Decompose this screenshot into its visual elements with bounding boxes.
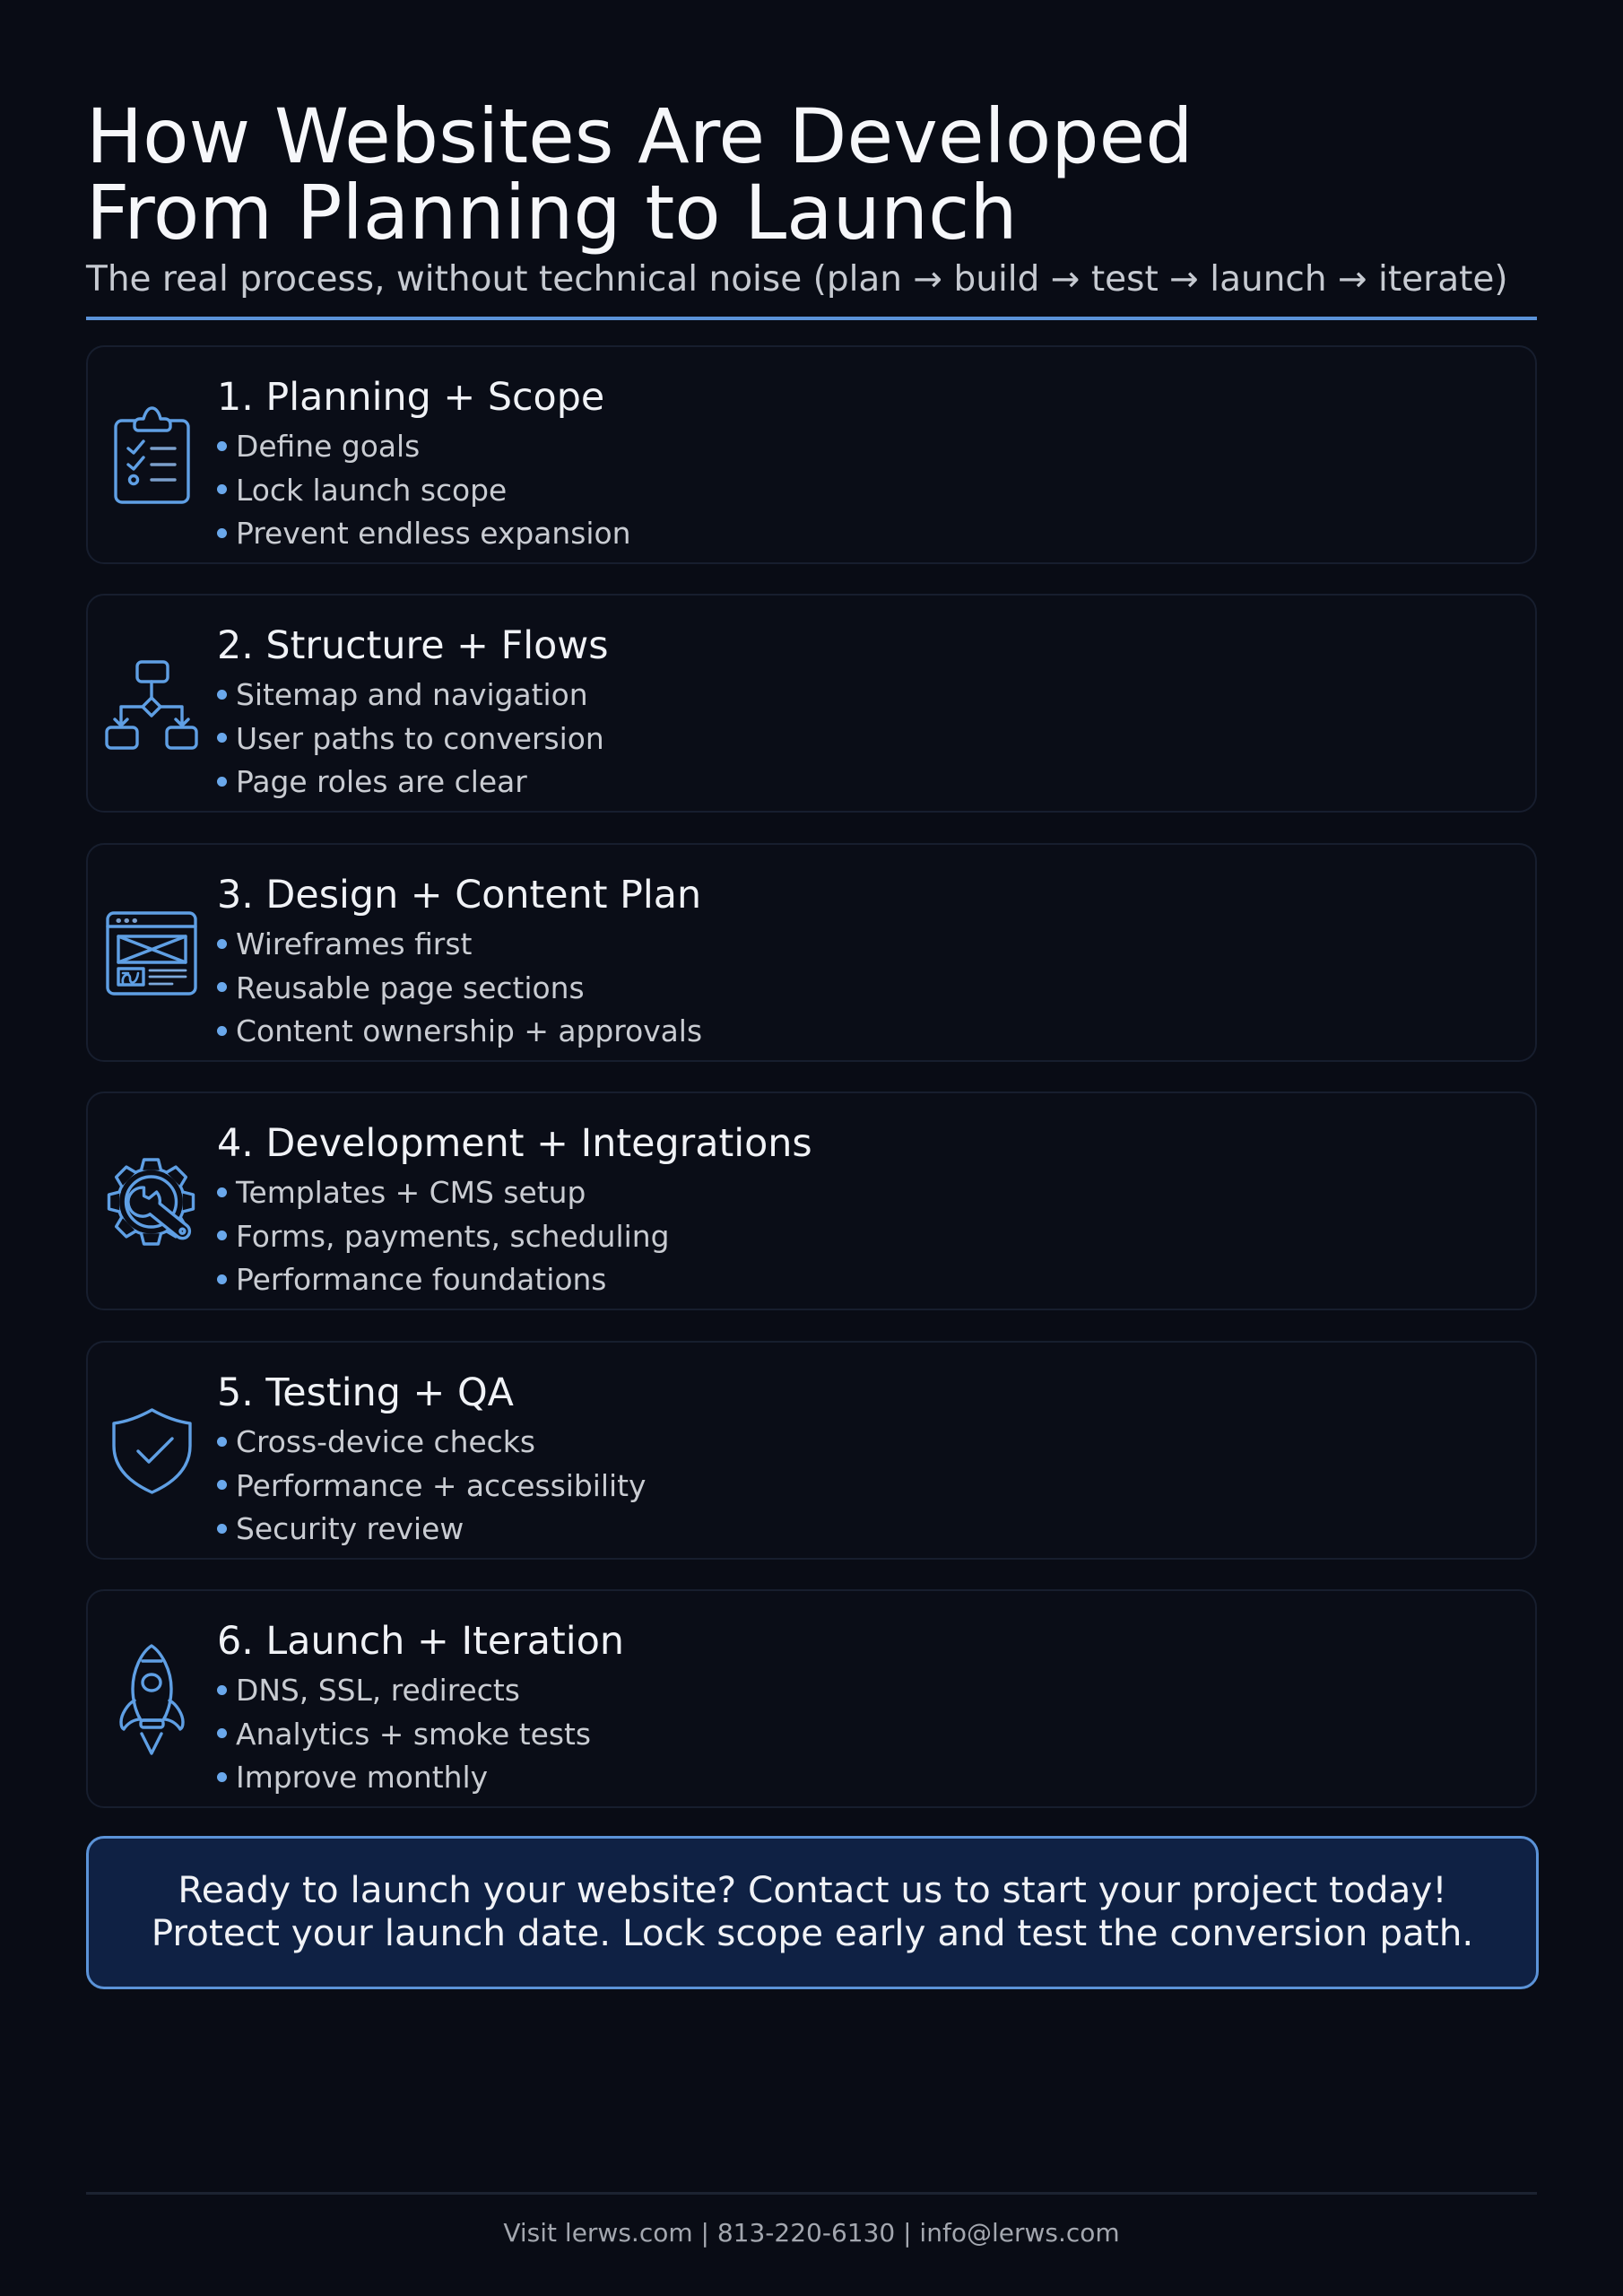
bullet list: Forms, payments, scheduling (236, 1218, 669, 1254)
panel: step 4 development and integrations (86, 1091, 1537, 1310)
bullet list (217, 429, 631, 551)
bullet list: Performance + accessibility (236, 1467, 647, 1503)
bullet list: Define goals (236, 429, 420, 464)
bullet list: Templates + CMS setup (236, 1175, 586, 1210)
heading: 2. Structure + Flows (217, 623, 609, 668)
callout: call to action: Protect your launch date. Lock scope early and test the conversion path. (152, 1911, 1473, 1954)
bullet list: Wireframes first (236, 926, 472, 961)
heading: 1. Planning + Scope (217, 375, 604, 420)
bullet list (217, 677, 604, 799)
icon: browser wireframe (106, 911, 197, 996)
bullet list: Sitemap and navigation (236, 677, 588, 712)
footer contact line: Visit lerws.com | 813-220-6130 | info@lerws.com (503, 2218, 1120, 2248)
icon: shield check (112, 1408, 192, 1494)
bullet list: Analytics + smoke tests (236, 1717, 591, 1751)
heading: 3. Design + Content Plan (217, 873, 701, 918)
bullet list (217, 1175, 669, 1297)
icon: rocket (119, 1644, 185, 1755)
icon: clipboard checklist (114, 406, 190, 504)
footer rule (86, 2192, 1537, 2195)
bullet list: User paths to conversion (236, 721, 604, 755)
callout: call to action: Ready to launch your website? Contact us to start your project today! (178, 1868, 1447, 1911)
header rule (86, 317, 1537, 320)
bullet list (217, 1673, 591, 1795)
panel: step 6 launch and iteration (86, 1589, 1537, 1808)
bullet list: Improve monthly (236, 1760, 488, 1795)
bullet list: Prevent endless expansion (236, 516, 631, 551)
title: From Planning to Launch (86, 169, 1018, 257)
bullet list: Security review (236, 1511, 464, 1546)
title: How Websites Are Developed (86, 92, 1193, 180)
heading: 6. Launch + Iteration (217, 1619, 624, 1664)
subtitle: The real process, without technical noise (plan → build → test → launch → iterate) (86, 259, 1508, 300)
panel: step 5 testing and QA (86, 1341, 1537, 1560)
bullet list (217, 926, 702, 1048)
heading: 5. Testing + QA (217, 1370, 514, 1415)
bullet list: Reusable page sections (236, 970, 585, 1004)
panel: step 3 design and content plan (86, 843, 1537, 1062)
bullet list: Content ownership + approvals (236, 1013, 702, 1048)
title (86, 92, 1193, 257)
callout: call to action (86, 1836, 1539, 1989)
bullet list: DNS, SSL, redirects (236, 1673, 520, 1708)
bullet list: Cross-device checks (236, 1424, 535, 1459)
panel: step 2 structure and flows (86, 594, 1537, 813)
panel: step 1 planning and scope (86, 345, 1537, 564)
bullet list (217, 1424, 647, 1546)
bullet list: Page roles are clear (236, 764, 527, 799)
icon: flow diagram (105, 660, 198, 750)
heading: 4. Development + Integrations (217, 1121, 812, 1166)
bullet list: Lock launch scope (236, 472, 507, 508)
icon: gear and wrench (108, 1158, 195, 1246)
bullet list: Performance foundations (236, 1262, 606, 1297)
